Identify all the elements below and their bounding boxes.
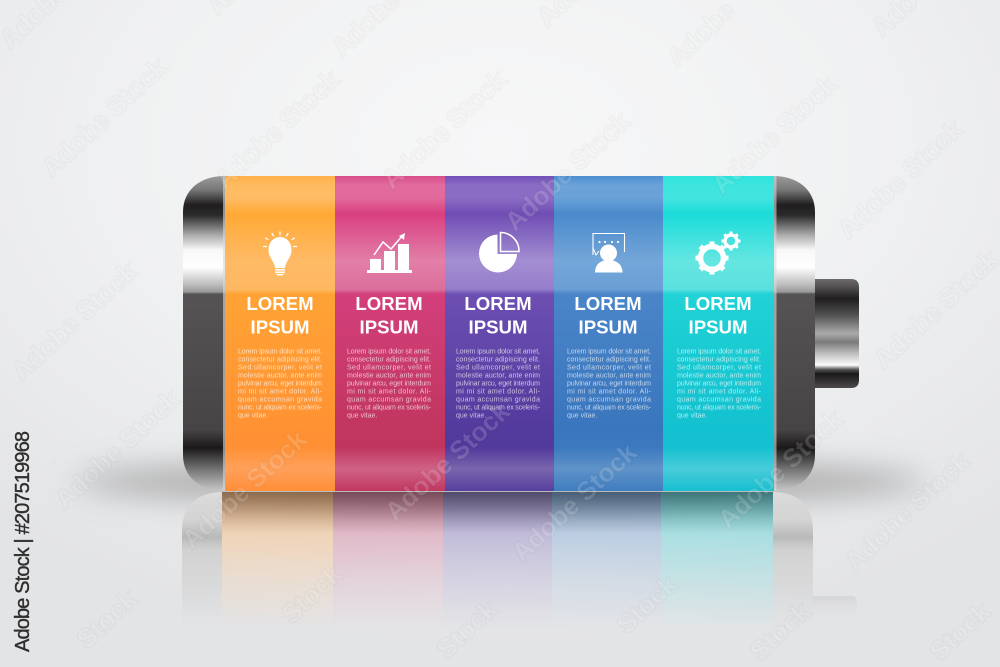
heading: column 3: LOREM [464, 293, 532, 314]
stock watermarks: Adobe Stock [376, 64, 513, 194]
body text: column 5 [677, 348, 762, 420]
body text: column 3: que vitae. [456, 412, 486, 420]
body text: column 2 [347, 348, 432, 420]
left metal cap [183, 176, 225, 491]
stock watermarks: Adobe Stock [506, 437, 643, 567]
body text: column 2: pulvinar arcu, eget interdum [347, 380, 431, 388]
icon: person with speech bubble [593, 234, 624, 272]
stock watermarks: Adobe Stock [832, 114, 969, 244]
stock watermarks: Stock [924, 596, 996, 666]
body text: column 2: molestie auctor, ante enim [347, 372, 431, 380]
body text: column 1: Sed ullamcorper, velit et [238, 364, 322, 372]
body text: column 4 [567, 348, 652, 420]
stock watermarks: Stock [744, 596, 816, 666]
icon: light bulb [264, 232, 296, 276]
stock watermarks: Adobe Stock [6, 256, 143, 386]
body text: column 3: nunc, ut aliquam ex sceleris- [456, 404, 541, 412]
body text: column 5: mi mi sit amet dolor. Ali- [677, 388, 762, 396]
body text: column 1 [238, 348, 323, 420]
heading: column 3: IPSUM [469, 316, 527, 338]
heading: column 1: IPSUM [251, 316, 309, 338]
body text: column 1: molestie auctor, ante enim [238, 372, 322, 380]
body text: column 3 [456, 348, 541, 420]
battery reflection [182, 492, 857, 630]
heading: column 5: LOREM [684, 293, 752, 314]
battery body [183, 176, 859, 491]
body text: column 4: quam accumsan gravida [567, 396, 651, 404]
segment: pink [335, 176, 445, 491]
body text: column 5: Lorem ipsum dolor sit amet, [677, 348, 761, 356]
stock watermarks: Stock [431, 594, 503, 664]
body text: column 1: nunc, ut aliquam ex sceleris- [238, 404, 323, 412]
stock watermarks: Adobe Stock [36, 52, 173, 182]
body text: column 4: mi mi sit amet dolor. Ali- [567, 388, 652, 396]
body text: column 3: quam accumsan gravida [456, 396, 540, 404]
body text: column 2: Sed ullamcorper, velit et [347, 364, 431, 372]
icon: bar chart [367, 233, 412, 273]
body text: column 2: quam accumsan gravida [347, 396, 431, 404]
body text: column 4: molestie auctor, ante enim [567, 372, 651, 380]
body text: column 4: consectetur adipiscing elit. [567, 356, 651, 364]
body text: column 2: que vitae. [347, 412, 377, 420]
body text: column 2: consectetur adipiscing elit. [347, 356, 431, 364]
body text: column 1: quam accumsan gravida [238, 396, 322, 404]
heading: column 4: IPSUM [579, 316, 637, 338]
body text: column 3: Sed ullamcorper, velit et [456, 364, 540, 372]
stock watermarks: Adobe Stock [209, 64, 346, 194]
icon: pie chart [479, 232, 519, 272]
body text: column 5: nunc, ut aliquam ex sceleris- [677, 404, 762, 412]
stock watermarks: Adobe Stock [839, 446, 976, 576]
stock watermarks: Adobe Stock [176, 424, 313, 554]
segment: blue [554, 176, 663, 491]
body text: column 4: nunc, ut aliquam ex sceleris- [567, 404, 652, 412]
stock watermarks: Adobe Stock [379, 396, 516, 526]
heading: column 2: LOREM [355, 293, 423, 314]
body text: column 5: Sed ullamcorper, velit et [677, 364, 761, 372]
segment: orange [225, 176, 335, 491]
body text: column 5: consectetur adipiscing elit. [677, 356, 761, 364]
body text: column 3: consectetur adipiscing elit. [456, 356, 540, 364]
terminal [815, 279, 859, 388]
body text: column 1: que vitae. [238, 412, 268, 420]
body text: column 1: pulvinar arcu, eget interdum [238, 380, 322, 388]
stock watermarks: Adobe Stock [712, 404, 849, 534]
segment: teal [663, 176, 774, 491]
heading: column 1: LOREM [246, 293, 314, 314]
stock watermarks: Stock [611, 569, 683, 639]
stock watermarks: Adobe Stock [49, 384, 186, 514]
body text: column 3: molestie auctor, ante enim [456, 372, 540, 380]
stock watermarks: Stock [276, 559, 348, 629]
icon: gears [696, 232, 740, 274]
right metal cap [773, 176, 815, 491]
stock image credit: Adobe Stock | #207519968 [12, 431, 34, 652]
body text: column 1: Lorem ipsum dolor sit amet, [238, 348, 322, 356]
heading: column 4: LOREM [574, 293, 642, 314]
stock watermarks: Adobe Stock [499, 106, 636, 236]
stock watermarks: Stock [71, 584, 143, 654]
body text: column 5: pulvinar arcu, eget interdum [677, 380, 761, 388]
body text: column 3: pulvinar arcu, eget interdum [456, 380, 540, 388]
body text: column 2: mi mi sit amet dolor. Ali- [347, 388, 432, 396]
body text: column 1: consectetur adipiscing elit. [238, 356, 322, 364]
body text: column 5: que vitae. [677, 412, 707, 420]
body text: column 4: que vitae. [567, 412, 597, 420]
ground shadow [75, 458, 925, 506]
body text: column 2: nunc, ut aliquam ex sceleris- [347, 404, 432, 412]
body text: column 4: pulvinar arcu, eget interdum [567, 380, 651, 388]
body text: column 5: molestie auctor, ante enim [677, 372, 761, 380]
body text: column 2: Lorem ipsum dolor sit amet, [347, 348, 431, 356]
body text: column 3: Lorem ipsum dolor sit amet, [456, 348, 540, 356]
stock watermarks: Adobe Stock [706, 69, 843, 199]
heading: column 5: IPSUM [689, 316, 747, 338]
body text: column 4: Lorem ipsum dolor sit amet, [567, 348, 651, 356]
body text: column 4: Sed ullamcorper, velit et [567, 364, 651, 372]
body text: column 1: mi mi sit amet dolor. Ali- [238, 388, 323, 396]
segment: purple [445, 176, 554, 491]
body text: column 5: quam accumsan gravida [677, 396, 761, 404]
heading: column 2: IPSUM [360, 316, 418, 338]
body text: column 3: mi mi sit amet dolor. Ali- [456, 388, 541, 396]
